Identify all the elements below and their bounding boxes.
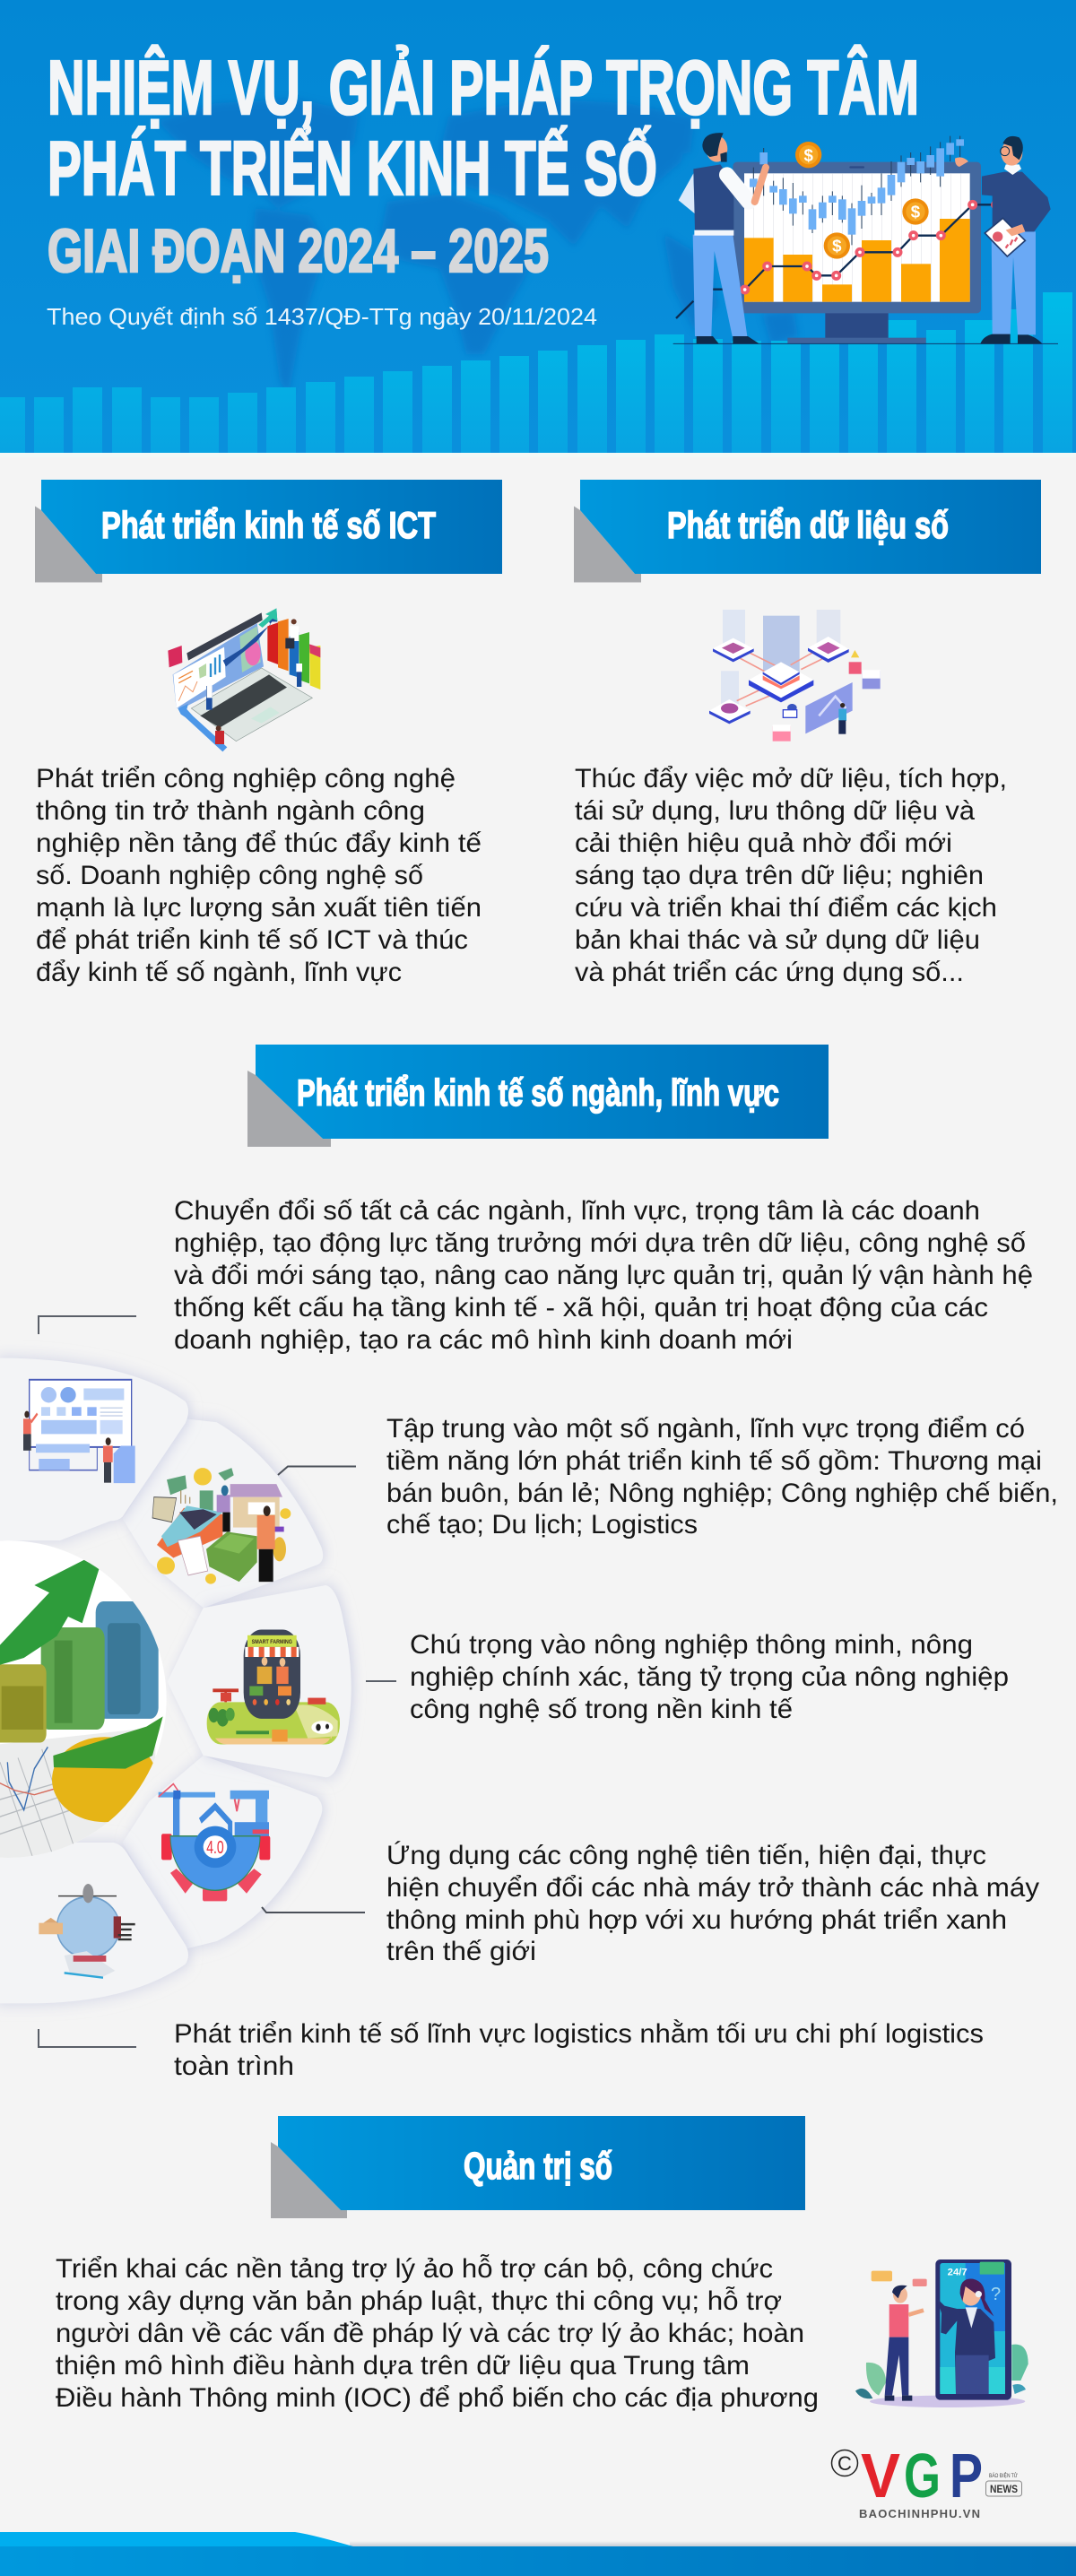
- text block: logistics: Phát triển kinh tế số lĩnh vực logistics nhằm tối ưu chi phí logistics: [174, 2019, 984, 2049]
- text block: digital governance: Triển khai các nền tảng trợ lý ảo hỗ trợ cán bộ, công chức: [56, 2254, 773, 2284]
- icon: industry 4.0 gear: 4.0: [206, 1836, 224, 1858]
- logo: VGP News: G: [904, 2441, 941, 2511]
- icon: retail and trade: [152, 1468, 291, 1584]
- header bottom strip: [0, 453, 1076, 457]
- body text: ICT economy: số. Doanh nghiệp công nghệ số: [36, 861, 423, 890]
- icon: digital dashboard: [23, 1380, 135, 1483]
- body text: data development: tái sử dụng, lưu thông dữ liệu và: [575, 796, 975, 826]
- central photo: 3D bar chart and pie: [0, 1540, 167, 1858]
- icon: virtual assistant on phone: [855, 2259, 1028, 2407]
- logo: VGP News: C: [837, 2452, 852, 2475]
- body text: data development: cứu và triển khai thí điểm các kịch: [575, 893, 997, 923]
- icon: industry 4.0 gear: [159, 1784, 270, 1901]
- text block: smart agriculture: nghiệp chính xác, tăng tỷ trọng của nông nghiệp: [410, 1662, 1009, 1692]
- logo: VGP News: [832, 2441, 1022, 2520]
- text block: key sectors: bán buôn, bán lẻ; Nông nghiệp; Công nghiệp chế biến,: [386, 1479, 1058, 1508]
- icon: logistics circle: [39, 1884, 135, 1978]
- footer band: [0, 2532, 1076, 2576]
- text block: key sectors: [386, 1414, 1058, 1540]
- banner: Phát triển kinh tế số ICT: [35, 480, 502, 583]
- text block: smart factories: thông minh phù hợp với xu hướng phát triển xanh: [386, 1905, 1007, 1935]
- text block: all sectors: nghiệp, tạo động lực tăng trưởng mới dựa trên dữ liệu, công nghệ số: [174, 1228, 1026, 1258]
- body text: data development: bản khai thác và sử dụng dữ liệu: [575, 925, 980, 955]
- icon: smart farming: [207, 1629, 340, 1744]
- coins: $: [803, 145, 813, 164]
- header period subtitle: GIAI ĐOẠN 2024 – 2025: [48, 217, 549, 285]
- text block: all sectors: [174, 1196, 1033, 1355]
- header title: PHÁT TRIỂN KINH TẾ SỐ: [48, 126, 657, 212]
- logo: VGP News: NEWS: [990, 2483, 1018, 2495]
- body text: data development: [575, 764, 1007, 987]
- text block: key sectors: Tập trung vào một số ngành, lĩnh vực trọng điểm có: [386, 1414, 1025, 1444]
- body text: ICT economy: mạnh là lực lượng sản xuất tiên tiến: [36, 893, 482, 923]
- banner: Phát triển kinh tế số ngành, lĩnh vực: [247, 1045, 829, 1147]
- body text: data development: Thúc đẩy việc mở dữ liệu, tích hợp,: [575, 764, 1007, 794]
- connector 2: [278, 1467, 356, 1475]
- icon: smart farming: SMART FARMING: [252, 1639, 292, 1645]
- illustration: analysts at chart monitor: [673, 133, 1058, 343]
- petals: [0, 1358, 351, 2003]
- man in vest: [679, 133, 766, 343]
- connector 3: [366, 1680, 396, 1682]
- body text: ICT economy: thông tin trở thành ngành công: [36, 796, 425, 826]
- header title: [48, 45, 919, 212]
- world map backdrop: [157, 99, 798, 395]
- coins: $: [911, 203, 921, 221]
- connector 5: [39, 2029, 136, 2047]
- logo: VGP News: P: [950, 2441, 983, 2511]
- radial petal diagram: [0, 1358, 351, 2003]
- text block: smart agriculture: [410, 1630, 1009, 1724]
- body text: ICT economy: Phát triển công nghiệp công nghệ: [36, 764, 456, 794]
- logo: VGP News: BAOCHINHPHU.VN: [859, 2507, 980, 2520]
- text block: all sectors: và đổi mới sáng tạo, nâng cao năng lực quản trị, quản lý vận hành hệ: [174, 1261, 1033, 1290]
- text block: logistics: [174, 2019, 984, 2081]
- icon: laptop with bar charts: [168, 608, 320, 751]
- text block: all sectors: Chuyển đổi số tất cả các ngành, lĩnh vực, trọng tâm là các doanh: [174, 1196, 980, 1226]
- text block: digital governance: thiện mô hình điều hành dựa trên dữ liệu qua Trung tâm: [56, 2351, 750, 2381]
- body text: ICT economy: [36, 764, 482, 987]
- banner: Quản trị số: Quản trị số: [464, 2145, 612, 2187]
- banner: Phát triển dữ liệu số: Phát triển dữ liệu số: [667, 504, 949, 546]
- connector 1: [39, 1316, 136, 1334]
- body text: data development: và phát triển các ứng dụng số...: [575, 958, 964, 987]
- text block: digital governance: trong xây dựng văn bản pháp luật, thực thi công vụ; hỗ trợ: [56, 2286, 782, 2316]
- body text: ICT economy: để phát triển kinh tế số ICT và thúc: [36, 925, 468, 955]
- text block: key sectors: chế tạo; Du lịch; Logistics: [386, 1510, 698, 1540]
- body text: data development: cải thiện hiệu quả nhờ đổi mới: [575, 828, 952, 858]
- icon: virtual assistant on phone: ?: [991, 2285, 1001, 2304]
- text block: all sectors: thống kết cấu hạ tầng kinh tế - xã hội, quản trị hoạt động của các: [174, 1293, 988, 1323]
- banner: Phát triển kinh tế số ICT: Phát triển kinh tế số ICT: [101, 504, 436, 546]
- text block: smart factories: [386, 1841, 1039, 1966]
- text block: digital governance: Điều hành Thông minh (IOC) để phổ biến cho các địa phương: [56, 2383, 819, 2413]
- text block: smart factories: Ứng dụng các công nghệ tiên tiến, hiện đại, thực: [386, 1841, 986, 1870]
- icon: data platforms: [709, 610, 881, 742]
- connector 4: [262, 1907, 365, 1912]
- icon: virtual assistant on phone: 24/7: [948, 2267, 968, 2277]
- trend line: [741, 199, 993, 294]
- banner: Phát triển kinh tế số ngành, lĩnh vực: Phát triển kinh tế số ngành, lĩnh vực: [297, 1071, 779, 1114]
- man with clipboard: [955, 136, 1051, 343]
- text block: smart factories: hiện chuyển đổi các nhà máy trở thành các nhà máy: [386, 1873, 1039, 1903]
- text block: all sectors: doanh nghiệp, tạo ra các mô hình kinh doanh mới: [174, 1325, 793, 1355]
- decision reference line: Theo Quyết định số 1437/QĐ-TTg ngày 20/11/2024: [47, 303, 597, 330]
- text block: key sectors: tiềm năng lớn phát triển kinh tế số gồm: Thương mại: [386, 1446, 1042, 1476]
- body text: ICT economy: đẩy kinh tế số ngành, lĩnh vực: [36, 958, 402, 987]
- body text: data development: sáng tạo dựa trên dữ liệu; nghiên: [575, 861, 984, 890]
- body text: ICT economy: nghiệp nền tảng để thúc đẩy kinh tế: [36, 828, 482, 858]
- text block: smart agriculture: công nghệ số trong nền kinh tế: [410, 1695, 793, 1724]
- header panel: [0, 0, 1076, 453]
- coins: $: [832, 237, 842, 256]
- text block: smart agriculture: Chú trọng vào nông nghiệp thông minh, nông: [410, 1630, 973, 1660]
- banner: Phát triển dữ liệu số: [574, 480, 1041, 583]
- logo: VGP News: BÁO ĐIỆN TỬ: [989, 2472, 1018, 2479]
- rising bar pattern: [0, 292, 1072, 453]
- text block: smart factories: trên thế giới: [386, 1937, 536, 1966]
- text block: digital governance: [56, 2254, 819, 2413]
- text block: logistics: toàn trình: [174, 2051, 294, 2081]
- coins: [795, 142, 929, 259]
- banner: Quản trị số: [271, 2116, 805, 2218]
- text block: digital governance: người dân về các vấn đề pháp lý và các trợ lý ảo khác; hoàn: [56, 2319, 804, 2348]
- logo: VGP News: V: [861, 2441, 900, 2511]
